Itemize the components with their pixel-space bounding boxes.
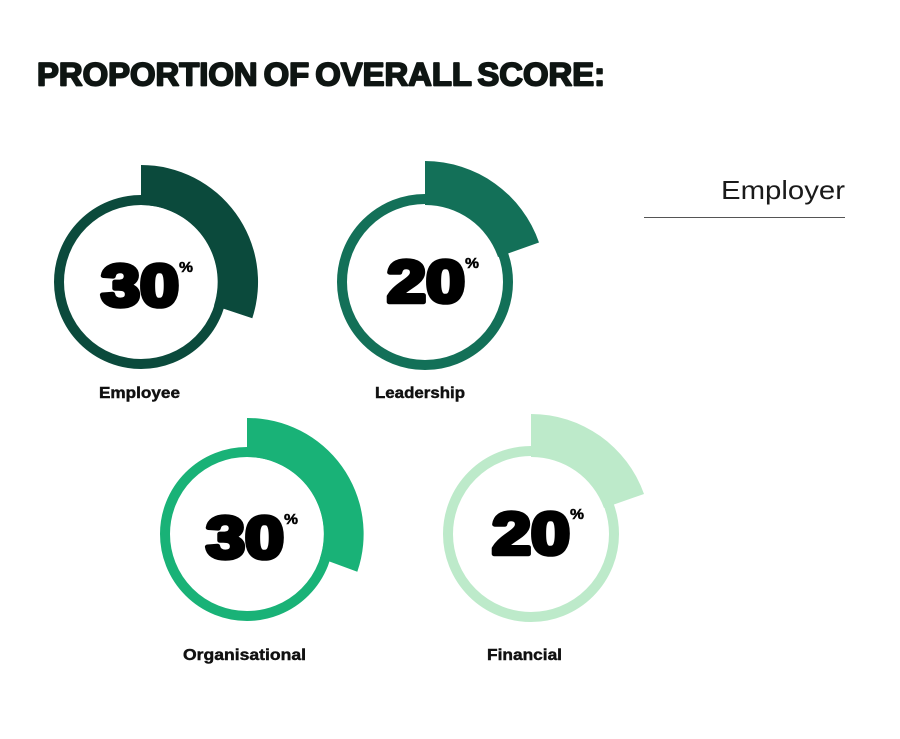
donut: Financial 20%: % (570, 506, 584, 523)
donut: Employee 30% (59, 165, 258, 402)
donut: Organisational 30% (165, 418, 364, 664)
donut: Leadership 20%: 20 (387, 249, 465, 315)
donut: Employee 30%: % (179, 259, 193, 276)
donut: Organisational 30%: Organisational (183, 647, 306, 664)
donut: Financial 20%: 20 (492, 501, 570, 567)
donut: Leadership 20%: % (465, 255, 479, 272)
donut: Leadership 20% (342, 161, 539, 402)
donut: Financial 20%: Financial (487, 647, 562, 664)
donut: Organisational 30%: 30 (206, 505, 284, 571)
title: PROPORTION OF OVERALL SCORE: (37, 56, 605, 92)
employer label with rule: Employer (721, 175, 845, 205)
donut: Financial 20% (448, 414, 644, 664)
donut: Employee 30%: Employee (99, 385, 180, 402)
donut: Organisational 30%: % (284, 511, 298, 528)
donut: Leadership 20%: Leadership (375, 385, 465, 402)
donut: Employee 30%: 30 (101, 253, 179, 319)
